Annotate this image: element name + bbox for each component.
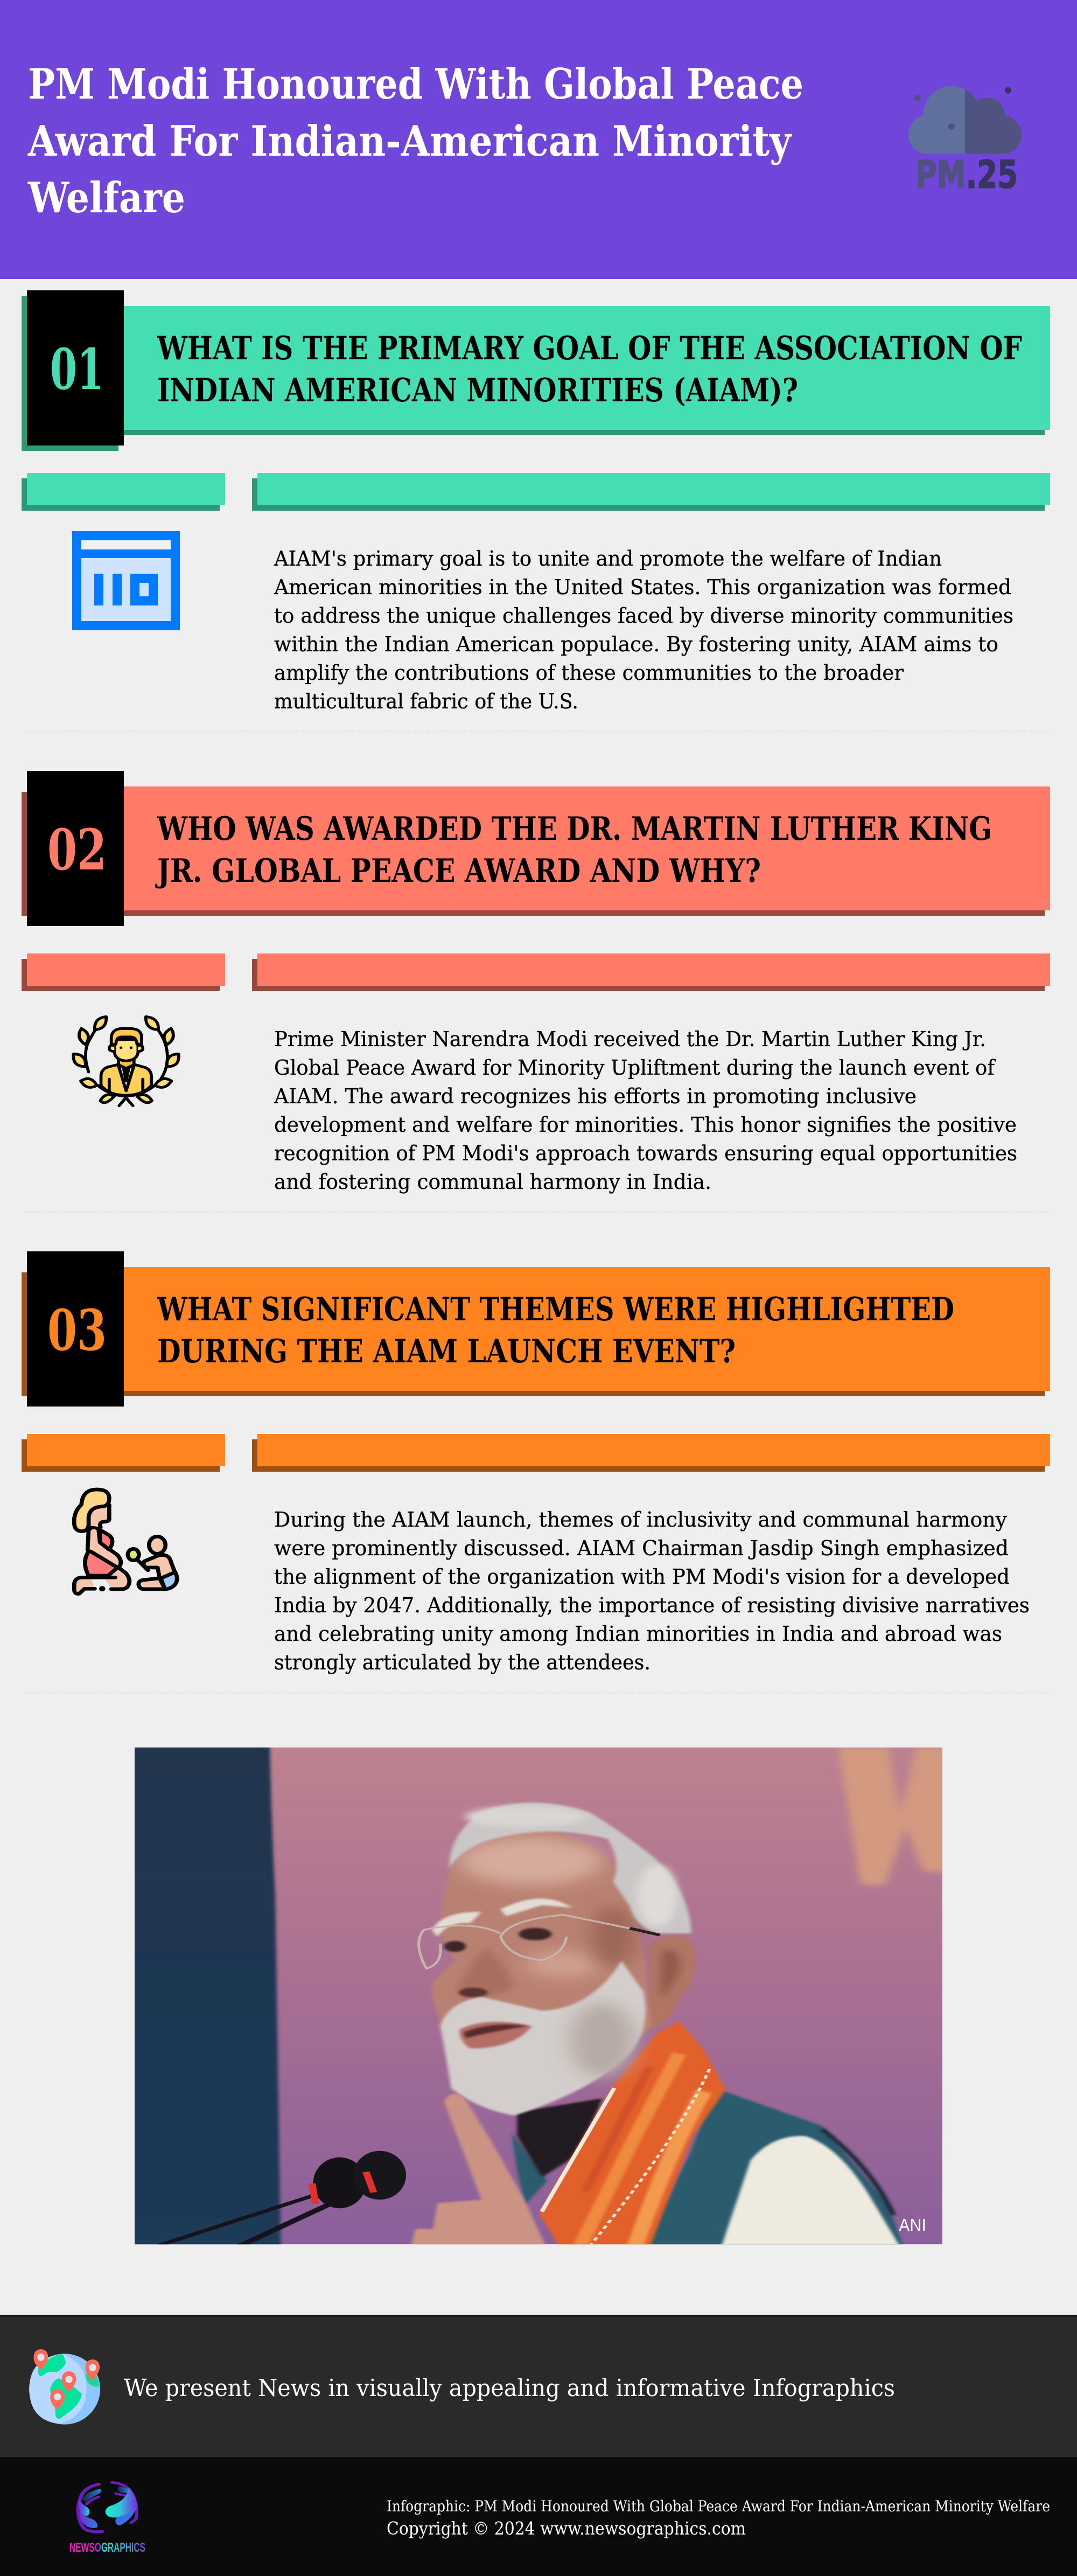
accent bars 1 — [22, 473, 1050, 511]
text block 2: Prime Minister Narendra Modi received the Dr. Martin Luther King Jr. — [274, 1027, 986, 1051]
heading bar 3: 03 — [47, 1297, 107, 1363]
text block 3: and celebrating unity among Indian minorities in India and abroad was — [274, 1622, 1002, 1646]
suit and kurta — [641, 2088, 905, 2250]
panel: tagline band — [0, 2315, 1077, 2457]
text block 2: and fostering communal harmony in India. — [274, 1170, 711, 1194]
icon: PM 2.5 cloud: PM.25 — [915, 152, 1018, 197]
panel: footer — [0, 2457, 1077, 2576]
text block 1: amplify the contributions of these communities to the broader — [274, 661, 904, 685]
eyes and brows — [432, 1912, 481, 1937]
heading bar 1: 01 — [50, 336, 104, 402]
heading bar 2: 02 — [47, 817, 107, 883]
ear — [649, 1936, 696, 2030]
scarf — [539, 2021, 726, 2250]
text block 3: the alignment of the organization with PM Modi's vision for a developed — [274, 1565, 1010, 1589]
face — [431, 1832, 651, 2035]
tagline text: We present News in visually appealing and informative Infographics — [124, 2375, 895, 2402]
icon: laureate person — [73, 1017, 179, 1106]
accent bars 3 — [22, 1434, 1050, 1472]
panel: question 3 — [22, 1251, 1050, 1693]
hand — [410, 2094, 547, 2250]
photo: PM Modi speaking at microphones — [124, 1738, 948, 2253]
logo: newsographics — [69, 2482, 145, 2555]
icon: blue window layout — [72, 531, 180, 630]
title: PM Modi Honoured With Global Peace — [28, 60, 803, 109]
heading bar 3 — [22, 1251, 1050, 1407]
text block 1: American minorities in the United States. This organization was formed — [274, 575, 1011, 599]
icon: globe with map pins — [29, 2349, 100, 2425]
text block 2: recognition of PM Modi's approach towards ensuring equal opportunities — [274, 1141, 1017, 1165]
text block 3: were prominently discussed. AIAM Chairman Jasdip Singh emphasized — [274, 1536, 1009, 1560]
icon: mother and child — [74, 1489, 177, 1594]
logo: newsographics: NEWSOGRAPHICS — [69, 2540, 145, 2555]
heading bar 1 — [22, 290, 1050, 451]
text block 1: within the Indian American populace. By fostering unity, AIAM aims to — [274, 632, 998, 656]
microphones — [157, 2195, 317, 2246]
hair — [450, 1803, 691, 1933]
beard — [440, 1961, 646, 2115]
text block 3: strongly articulated by the attendees. — [274, 1651, 651, 1674]
title: Award For Indian-American Minority — [27, 117, 792, 166]
heading bar 2 — [22, 771, 1050, 926]
text block 1: multicultural fabric of the U.S. — [274, 690, 578, 713]
panel: question 2 — [22, 771, 1050, 1212]
icon: PM 2.5 cloud — [908, 86, 1022, 197]
text block 1: AIAM's primary goal is to unite and promote the welfare of Indian — [274, 547, 942, 570]
heading bar 3: DURING THE AIAM LAUNCH EVENT? — [157, 1333, 736, 1370]
title — [27, 60, 803, 222]
credit text — [387, 2497, 1050, 2539]
text block 2: development and welfare for minorities. This honor signifies the positive — [274, 1113, 1017, 1137]
heading bar 1: INDIAN AMERICAN MINORITIES (AIAM)? — [157, 372, 798, 409]
text block 2: Global Peace Award for Minority Upliftment during the launch event of — [274, 1056, 996, 1080]
text block 1: to address the unique challenges faced by diverse minority communities — [274, 604, 1013, 628]
text block 2: AIAM. The award recognizes his efforts in promoting inclusive — [274, 1084, 917, 1108]
header band — [0, 0, 1077, 279]
text block 2 — [274, 1027, 1017, 1194]
title: Welfare — [27, 173, 185, 222]
text block 3 — [274, 1508, 1030, 1674]
panel: question 1 — [22, 290, 1050, 732]
text block 1 — [274, 547, 1013, 713]
photo: PM Modi speaking at microphones: ANI — [899, 2215, 926, 2235]
accent bars 2 — [22, 953, 1050, 991]
text block 3: During the AIAM launch, themes of inclusivity and communal harmony — [274, 1508, 1008, 1531]
heading bar 2: JR. GLOBAL PEACE AWARD AND WHY? — [155, 852, 761, 890]
credit text: Copyright © 2024 www.newsographics.com — [387, 2518, 746, 2539]
text block 3: India by 2047. Additionally, the importance of resisting divisive narratives — [274, 1593, 1030, 1617]
